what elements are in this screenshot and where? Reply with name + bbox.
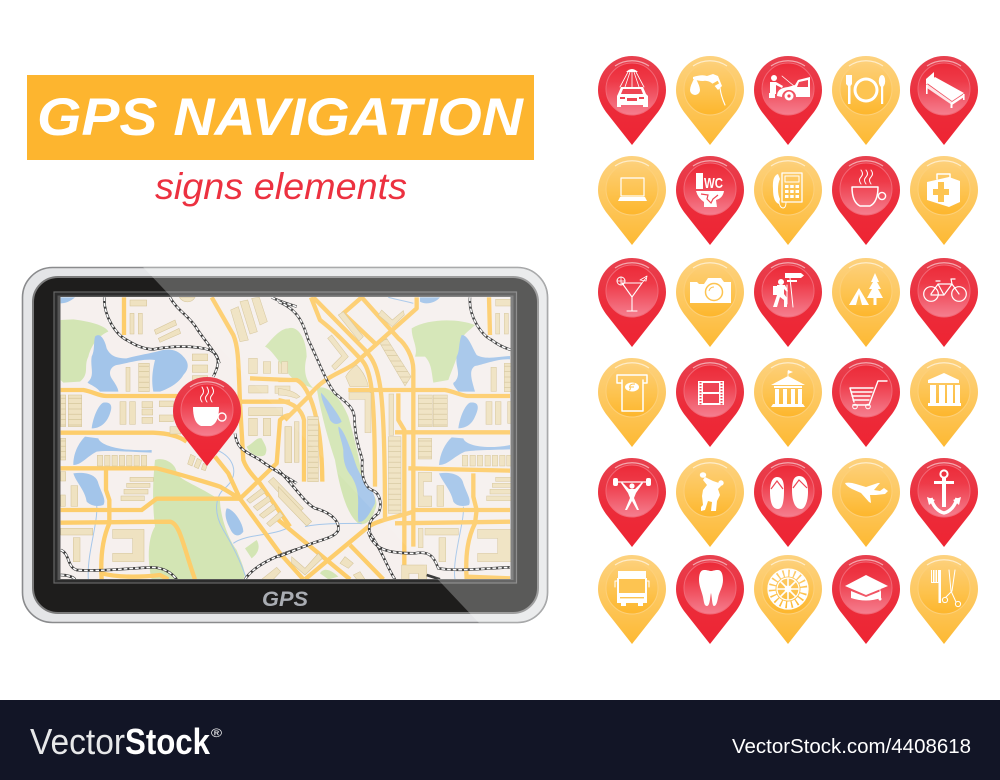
pin: anchor [910,458,978,547]
VectorStock logo: Vector [30,721,125,762]
VectorStock logo [30,721,222,762]
pin: museum [910,358,978,447]
pin: bank with flag [754,358,822,447]
pin: car wash [598,56,666,145]
map screen [60,297,510,579]
pin: coffee [832,156,900,245]
pin: first aid [910,156,978,245]
pin: graduation cap [832,555,900,644]
title banner: GPS NAVIGATION [37,88,525,147]
pin: hiker [754,258,822,347]
pin: phone [754,156,822,245]
footer bar [0,700,1000,780]
subtitle: signs elements [155,166,407,207]
GPS label: GPS [262,588,308,611]
pin: ATM [598,358,666,447]
pin: airplane [832,458,900,547]
pin: roulette [754,555,822,644]
pin: tooth [676,555,744,644]
pin: weightlifter [598,458,666,547]
device bezel [22,267,560,640]
pin: bus [598,555,666,644]
map marker: coffee [173,377,241,466]
VectorStock logo: ® [211,726,222,740]
pin: cocktail [598,258,666,347]
title banner [27,75,534,160]
panel: GPS tablet device [22,267,560,640]
pin: car repair [754,56,822,145]
pin: fuel [676,56,744,145]
pin: shopping cart [832,358,900,447]
VectorStock logo: Stock [125,721,211,762]
pin: restaurant [832,56,900,145]
pin: flip flops [754,458,822,547]
pin: discus thrower [676,458,744,547]
pin: bed [910,56,978,145]
pin: camera [676,258,744,347]
image id: VectorStock.com/4408618 [732,736,971,758]
pin: toilet WC: WC [704,175,723,192]
pin: laptop [598,156,666,245]
pin: toilet WC [676,156,744,245]
pin: camping [832,258,900,347]
pin: bicycle [910,258,978,347]
panel: pin icons grid [598,56,978,644]
pin: cinema [676,358,744,447]
pin: comb and scissors [910,555,978,644]
